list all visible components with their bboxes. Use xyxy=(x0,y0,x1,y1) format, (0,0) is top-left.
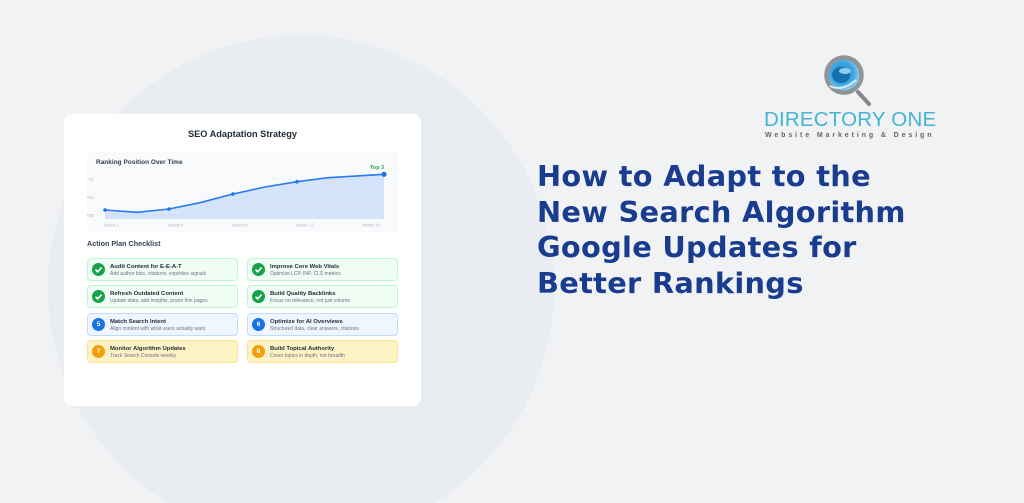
checklist item 6: 6 xyxy=(257,321,260,328)
checklist item 5: Match Search Intent xyxy=(110,318,166,324)
checklist item 2 xyxy=(247,258,398,281)
main heading: How to Adapt to the xyxy=(537,159,871,193)
checklist item 4 xyxy=(247,285,398,308)
main heading: Better Rankings xyxy=(537,266,804,300)
logo tagline: Website Marketing & Design xyxy=(765,132,934,138)
main heading: New Search Algorithm xyxy=(537,195,906,229)
checklist item 6: Structured data, clear answers, citations xyxy=(270,326,359,332)
line chart: Top 3 xyxy=(370,165,384,171)
checklist item 3 xyxy=(87,285,238,308)
line chart: Week 16 xyxy=(362,222,380,227)
line chart xyxy=(87,165,387,227)
checklist item 1 xyxy=(87,258,238,281)
checklist item 6 xyxy=(247,313,398,336)
checklist item 3: Update stats, add insights, prune thin pages xyxy=(110,298,208,304)
checklist item 8: Cover topics in depth, not breadth xyxy=(270,352,345,358)
line chart: Week 8 xyxy=(232,222,248,227)
checklist item 8 xyxy=(247,340,398,363)
main heading: Google Updates for xyxy=(537,230,857,264)
main heading xyxy=(537,159,906,300)
logo: Directory One xyxy=(764,55,936,138)
panel: SEO strategy card xyxy=(64,114,421,406)
checklist item 5 xyxy=(87,313,238,336)
logo wordmark: DIRECTORY ONE xyxy=(764,108,936,130)
checklist item 3: Refresh Outdated Content xyxy=(110,290,183,296)
checklist heading: Action Plan Checklist xyxy=(87,239,160,248)
checklist item 8: 8 xyxy=(257,348,260,355)
icon: magnifying glass with globe xyxy=(824,55,872,106)
chart title: Ranking Position Over Time xyxy=(96,158,183,166)
line chart: Week 12 xyxy=(296,222,314,227)
checklist item 7: Track Search Console weekly xyxy=(110,352,176,358)
checklist item 7 xyxy=(87,340,238,363)
checklist item 5: 5 xyxy=(97,321,100,328)
checklist item 6: Optimize for AI Overviews xyxy=(270,318,343,324)
checklist item 2: Improve Core Web Vitals xyxy=(270,264,339,270)
checklist item 1: Audit Content for E-E-A-T xyxy=(110,264,182,270)
checklist item 5: Align content with what users actually want xyxy=(110,326,205,332)
checklist item 1: Add author bios, citations, expertise signals xyxy=(110,270,206,276)
panel: ranking chart xyxy=(87,151,398,233)
checklist item 8: Build Topical Authority xyxy=(270,346,334,352)
checklist item 7: Monitor Algorithm Updates xyxy=(110,346,186,352)
line chart: #1 xyxy=(89,177,94,182)
checklist item 7: 7 xyxy=(97,348,100,355)
checklist item 4: Focus on relevance, not just volume xyxy=(270,298,350,304)
line chart: Week 4 xyxy=(168,222,184,227)
checklist item 2: Optimize LCP, INP, CLS metrics xyxy=(270,270,341,276)
line chart: Week 1 xyxy=(104,222,120,227)
card title: SEO Adaptation Strategy xyxy=(188,129,297,139)
checklist item 4: Build Quality Backlinks xyxy=(270,290,335,296)
background circle xyxy=(48,35,554,503)
